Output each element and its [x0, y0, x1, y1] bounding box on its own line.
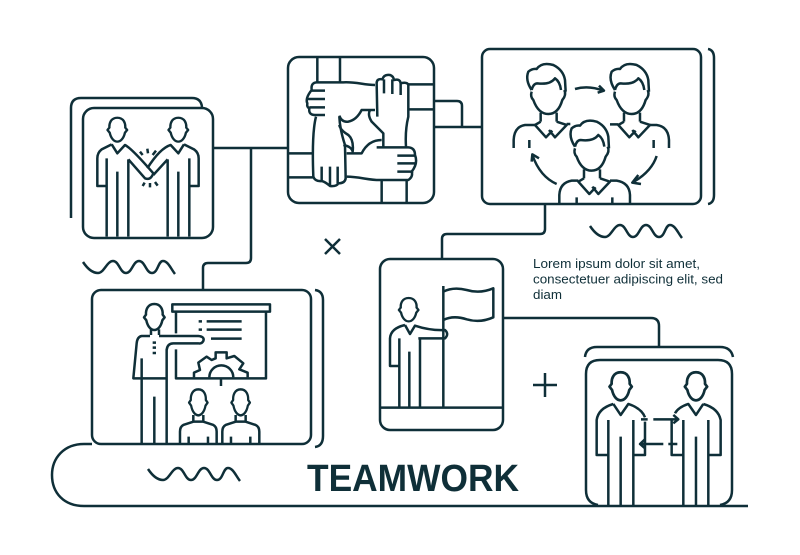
baseline ribbon [52, 444, 748, 506]
text block: diam [533, 287, 562, 302]
panel: exchange between two people [585, 347, 733, 505]
panel: handshake [71, 98, 213, 238]
text block: consectetuer adipiscing elit, sed [533, 272, 723, 286]
card frame [92, 290, 311, 444]
side bracket [708, 49, 714, 204]
icon: presenter with screen and audience [133, 304, 270, 444]
squiggle: three people [590, 225, 682, 238]
card frame [380, 259, 503, 430]
icon: two people shaking hands [97, 118, 199, 237]
icon: person holding flag [380, 286, 503, 408]
arrows [575, 86, 604, 93]
panel: presenter [92, 290, 323, 447]
card frame [482, 49, 701, 204]
back frame [585, 347, 733, 357]
icon: two people exchanging [597, 372, 721, 505]
text block: Lorem ipsum dolor sit amet, [533, 256, 700, 271]
plus sign [533, 373, 557, 397]
back frame [71, 98, 202, 218]
side bracket [315, 290, 323, 447]
panel: leader with flag [380, 259, 503, 430]
panel: joined hands [287, 57, 434, 203]
multiply sign [325, 239, 340, 254]
squiggle: handshake [83, 261, 175, 274]
title: TEAMWORK [307, 458, 520, 500]
icon: three people with cycle arrows [514, 64, 669, 203]
connector lines [203, 101, 659, 347]
card frame [586, 360, 732, 505]
icon: four interlocked hands [287, 57, 433, 203]
card frame [83, 108, 213, 238]
card frame [288, 57, 434, 203]
panel: three people rotating roles [482, 49, 714, 204]
squiggle: presenter [148, 468, 240, 481]
